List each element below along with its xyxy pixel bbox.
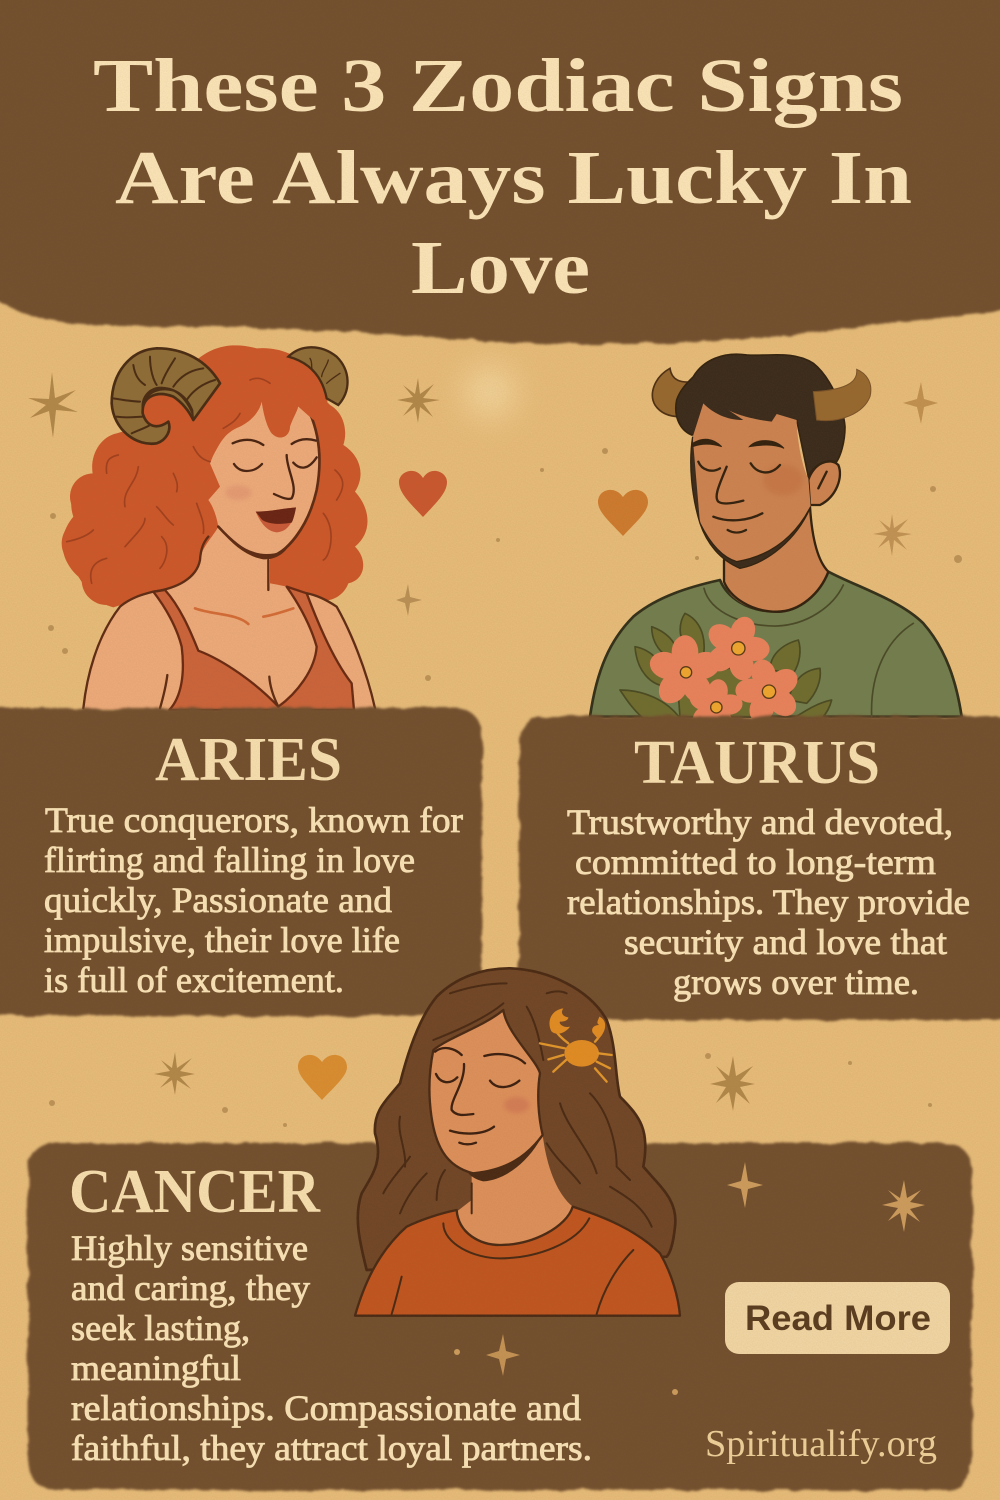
title: Are Always Lucky In: [115, 136, 912, 220]
crab left pincer: [549, 1008, 570, 1034]
heart: cancer: [298, 1055, 347, 1100]
taurus collar and sleeve: [704, 585, 913, 717]
taurus leaves: [620, 613, 832, 718]
taurus neck outline: [724, 507, 828, 612]
aries right horn: [288, 347, 348, 405]
aries hair strands: [67, 378, 343, 583]
text: taurus description: relationships. They provide: [567, 882, 970, 922]
panel: cancer: [28, 1143, 972, 1490]
text: cancer description: and caring, they: [71, 1268, 310, 1308]
scattered dots: [48, 264, 962, 1127]
figure: aries woman: [62, 345, 375, 710]
title: [93, 44, 912, 310]
cancer eyes brows nose mouth: [435, 1048, 525, 1144]
cancer hair strands: [383, 983, 652, 1227]
cancer shirt: [355, 1207, 680, 1316]
aries collarbones: [195, 608, 293, 624]
sparkle: header: [657, 262, 697, 304]
text: cancer description: relationships. Compassionate and: [71, 1388, 581, 1428]
cancer neck: [457, 1135, 573, 1245]
sparkle: lower left: [154, 1052, 195, 1095]
button: read more: [725, 1282, 950, 1354]
sparkle: lower right: [710, 1056, 755, 1111]
text: taurus description: security and love that: [624, 922, 947, 962]
taurus neck: [724, 507, 828, 612]
panel: aries: [0, 708, 482, 1016]
crab body: [564, 1040, 599, 1067]
aries body outline: [83, 537, 375, 708]
text: taurus description: Trustworthy and devoted,: [567, 802, 953, 842]
cancer collar and folds: [392, 1183, 633, 1314]
cancer hair: [358, 968, 675, 1270]
taurus flower centres: [680, 642, 776, 713]
text: cancer description: Highly sensitive: [71, 1228, 308, 1268]
title: These 3 Zodiac Signs: [93, 44, 903, 128]
cancer jaw shadow: [468, 1135, 543, 1181]
cancer face: [429, 1010, 543, 1173]
heading: cancer: CANCER: [69, 1158, 321, 1226]
text: aries description: is full of excitement.: [44, 960, 344, 1000]
panel dots: [454, 1349, 678, 1395]
taurus right horn: [813, 369, 871, 421]
text: taurus description: [567, 802, 970, 1002]
button: read more: Read More: [745, 1299, 931, 1338]
sparkle: panel right: [882, 1180, 925, 1232]
aries jaw line: [218, 413, 319, 557]
text: taurus description: grows over time.: [673, 962, 919, 1002]
aries chin shadow: [218, 527, 288, 559]
icon: crab hair clip: [540, 1008, 612, 1082]
aries left horn: [112, 348, 220, 444]
text: aries description: flirting and falling in love: [44, 840, 415, 880]
taurus face: [691, 403, 811, 568]
taurus flowers: [646, 605, 811, 740]
crab claws and legs: [540, 1028, 612, 1082]
title: Love: [411, 226, 590, 310]
aries right horn ridges: [310, 358, 340, 383]
sparkle: small centre: [396, 584, 422, 616]
heading: aries: ARIES: [155, 726, 342, 794]
aries horn ridges: [113, 357, 215, 433]
text: aries description: quickly, Passionate and: [44, 880, 392, 920]
cancer blush: [504, 1097, 529, 1113]
heading: taurus: TAURUS: [634, 729, 880, 797]
aries face: [208, 400, 319, 557]
aries hair back: [62, 345, 367, 607]
figure: taurus man: [590, 354, 962, 740]
text: aries description: True conquerors, known for: [45, 800, 463, 840]
sparkle: right middle: [873, 514, 912, 556]
heart: taurus: [598, 490, 648, 536]
taurus ear: [808, 461, 840, 505]
figure: cancer woman: [355, 968, 680, 1316]
sparkle: panel lower: [486, 1334, 520, 1376]
aries mouth inner: [256, 507, 296, 524]
text: taurus description: committed to long-term: [575, 842, 936, 882]
panel: taurus: [519, 716, 1000, 1020]
soft glow: [464, 366, 516, 418]
aries mouth: [256, 507, 296, 532]
aries cheeks: [225, 485, 252, 500]
panel: header: [0, 0, 1000, 344]
taurus brows: [693, 439, 784, 448]
taurus blush: [763, 465, 803, 495]
sparkle: centre top: [397, 378, 440, 423]
heart: aries: [399, 471, 447, 517]
aries horn inner shade: [142, 387, 194, 420]
sparkle: upper left: [28, 372, 78, 438]
taurus eyes nose mouth: [698, 462, 827, 532]
text: aries description: [44, 800, 463, 1000]
taurus hair: [676, 354, 845, 477]
taurus shirt: [590, 572, 962, 717]
sparkle: panel left: [727, 1162, 763, 1208]
aries brows and eyes: [233, 439, 317, 499]
taurus left horn: [652, 368, 693, 417]
text: cancer description: faithful, they attract loyal partners.: [71, 1428, 592, 1468]
aries body: [83, 527, 375, 710]
text: cancer description: seek lasting,: [71, 1308, 250, 1348]
sparkle: upper right: [903, 382, 938, 424]
crab right pincer: [592, 1017, 605, 1039]
aries hair front: [190, 360, 330, 462]
aries top: [153, 587, 354, 710]
text: website: Spiritualify.org: [705, 1423, 937, 1465]
taurus jaw: [691, 437, 811, 568]
text: cancer description: [71, 1228, 592, 1468]
text: aries description: impulsive, their love life: [44, 920, 400, 960]
text: cancer description: meaningful: [71, 1348, 241, 1388]
